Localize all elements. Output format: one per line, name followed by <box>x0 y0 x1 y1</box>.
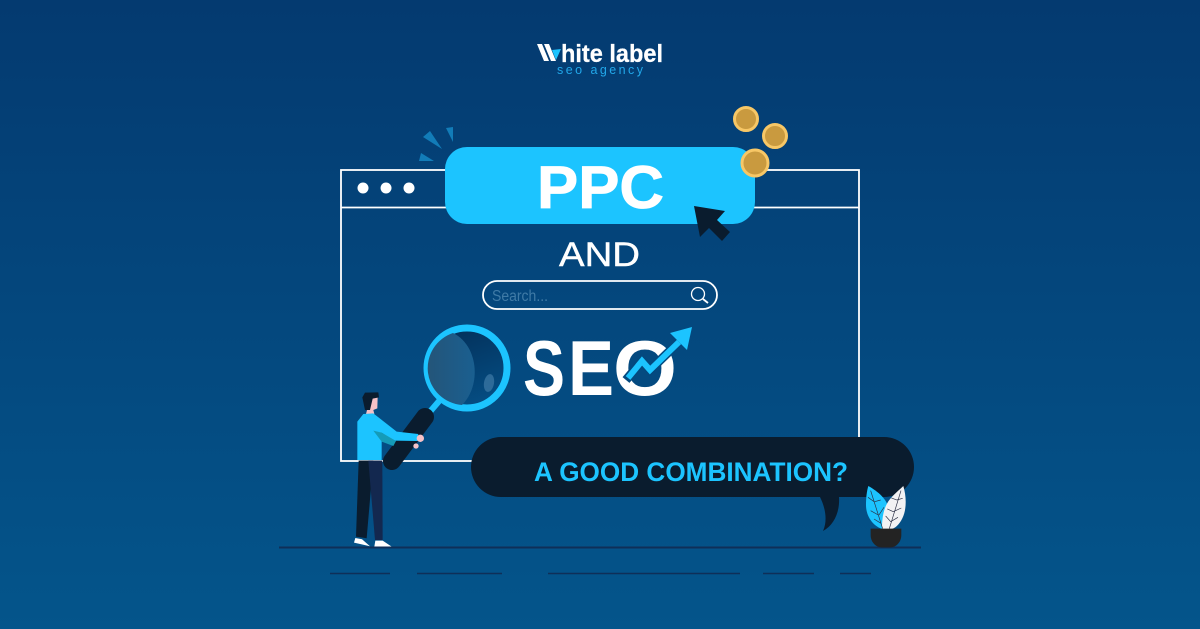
PPC label: PPC <box>537 154 664 221</box>
pot <box>871 529 901 547</box>
coins <box>734 108 786 176</box>
logo wordmark: hite label <box>561 40 663 68</box>
lens highlight crescent <box>428 333 475 405</box>
torso and arm <box>357 413 418 460</box>
shoes <box>354 538 370 546</box>
glass neck <box>428 400 440 414</box>
PPC button <box>445 147 755 224</box>
bubble question: A GOOD COMBINATION? <box>534 457 848 487</box>
hands <box>417 435 424 442</box>
blue leaf <box>866 486 888 529</box>
magnifying glass <box>392 328 507 461</box>
leaf veins <box>868 491 903 529</box>
letter S: S <box>523 324 565 412</box>
arm shadow <box>373 431 396 446</box>
search bar <box>483 281 717 309</box>
cursor arrow <box>694 206 730 241</box>
letter O: O <box>613 324 677 412</box>
search placeholder: Search... <box>492 288 548 305</box>
neck and face <box>366 397 378 414</box>
growth arrow <box>626 327 692 380</box>
SEO heading <box>523 324 692 412</box>
glass handle <box>392 417 425 461</box>
letter E: E <box>568 324 614 412</box>
hair <box>362 392 379 410</box>
white leaf <box>882 486 906 529</box>
lens glint <box>483 373 495 393</box>
speech bubble <box>471 437 914 531</box>
AND heading: AND <box>559 236 640 274</box>
spark marks <box>419 127 453 161</box>
search icon <box>692 288 708 303</box>
browser window <box>341 170 859 461</box>
logo mark <box>537 44 561 61</box>
ground dashes <box>330 572 871 574</box>
legs <box>356 461 373 538</box>
potted plant <box>866 486 906 547</box>
logo <box>537 40 663 77</box>
ground line <box>279 546 921 548</box>
window dots <box>358 182 414 194</box>
person <box>354 392 424 547</box>
logo tagline: seo agency <box>557 63 644 77</box>
glass lens <box>427 328 507 408</box>
